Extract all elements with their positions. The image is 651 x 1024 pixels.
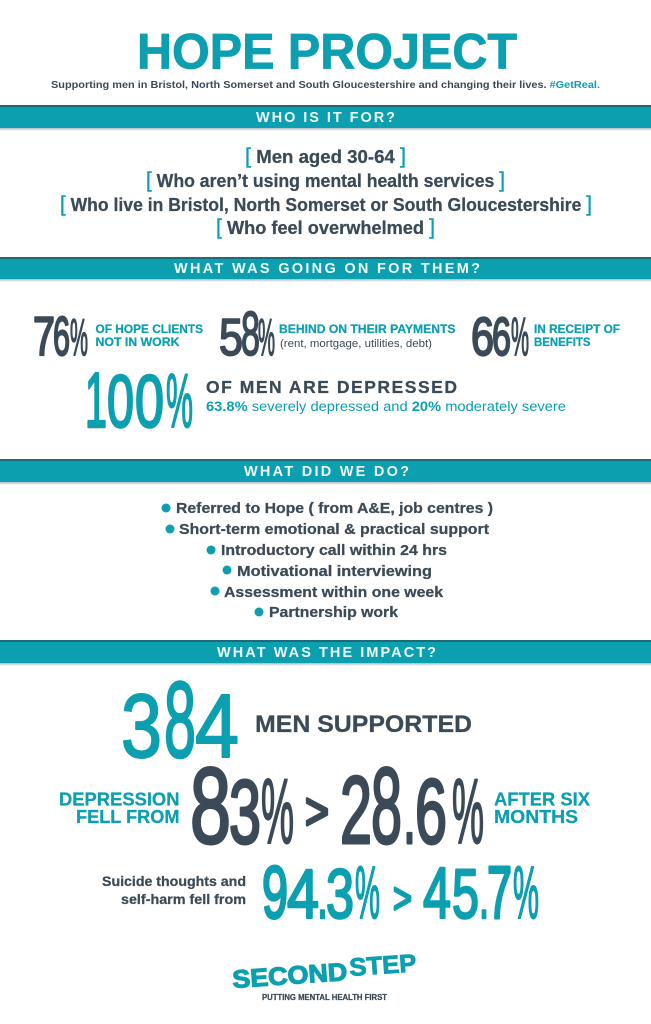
stat: 66% in receipt of benefits: IN RECEIPT OF — [534, 322, 620, 336]
stat: depression fell: % — [261, 761, 294, 863]
stat: depression fell: . — [403, 763, 416, 863]
section band: what was the impact — [0, 640, 651, 666]
stat: suicide thoughts fell: 3 — [326, 855, 354, 933]
text: % — [513, 851, 539, 934]
stat: 100% depressed: 0 — [135, 360, 164, 443]
stat: suicide thoughts fell: Suicide thoughts and — [102, 873, 246, 889]
stat: 66% in receipt of benefits: BENEFITS — [534, 335, 590, 349]
stat: 76% not in work: % — [70, 309, 88, 367]
stat: suicide thoughts fell: . — [479, 855, 489, 933]
stat: 76% not in work: OF HOPE CLIENTS — [96, 322, 203, 336]
audience: men aged 30-64: [ Men aged 30-64 ] — [245, 145, 406, 168]
stat: depression fell — [59, 745, 590, 866]
stat: 384 men supported: 8 — [164, 659, 196, 780]
stat: 100% depressed: OF MEN ARE DEPRESSED — [206, 377, 457, 397]
stat: 76% not in work: 7 — [33, 305, 55, 367]
stat: suicide thoughts fell: self-harm fell from — [121, 891, 246, 907]
list item: short-term support: Short-term emotional & practical support — [179, 521, 489, 538]
stat: 100% depressed: 0 — [107, 360, 134, 443]
list item: introductory call: Introductory call within 24 hrs — [221, 542, 447, 559]
stat: 384 men supported — [121, 659, 472, 780]
stat: 384 men supported: MEN SUPPORTED — [255, 711, 472, 738]
list item: partnership work: Partnership work — [269, 604, 399, 621]
stat: depression fell: 8 — [371, 745, 402, 866]
stat: 76% not in work — [33, 305, 203, 367]
section band: what was going on: WHAT WAS GOING ON FOR THEM? — [174, 261, 480, 277]
stat: 58% behind on payments: % — [258, 309, 275, 367]
panel: what did we do list — [162, 500, 493, 621]
list item: assessment: Assessment within one week — [224, 584, 444, 601]
stat: suicide thoughts fell — [102, 851, 539, 934]
section band: what was going on — [0, 257, 651, 282]
stat: depression fell: FELL FROM — [76, 807, 180, 827]
section band: who is it for: WHO IS IT FOR? — [256, 110, 395, 126]
stat: 66% in receipt of benefits — [471, 307, 620, 367]
stat: 66% in receipt of benefits: 6 — [492, 307, 511, 367]
stat: depression fell: MONTHS — [494, 807, 578, 827]
stat: 100% depressed: % — [166, 359, 193, 444]
stat: 58% behind on payments: BEHIND ON THEIR PAYMENTS — [279, 322, 456, 336]
audience: location: [ Who live in Bristol, North Somerset or South Gloucestershire ] — [60, 193, 592, 216]
stat: 100% depressed — [85, 356, 566, 444]
stat: depression fell: 8 — [190, 745, 231, 866]
stat: 100% depressed: 63.8% severely depressed and 20% moderately severe — [206, 398, 566, 414]
stat: 384 men supported: 3 — [121, 677, 162, 777]
logo: Second Step — [231, 949, 417, 1002]
logo: Second Step: SECOND — [231, 958, 348, 994]
section band: what did we do: WHAT DID WE DO? — [244, 464, 409, 480]
audience: not using services: [ Who aren’t using mental health services ] — [146, 169, 505, 192]
stat: depression fell: > — [305, 783, 329, 841]
stat: suicide thoughts fell: . — [317, 855, 328, 933]
stat: 58% behind on payments: (rent, mortgage, utilities, debt) — [280, 338, 432, 350]
stat: 384 men supported: 4 — [195, 677, 239, 777]
stat: depression fell: 3 — [229, 763, 261, 863]
stat: 58% behind on payments: 5 — [219, 309, 243, 367]
section band: who is it for — [0, 105, 651, 131]
stat: suicide thoughts fell: > — [393, 874, 412, 923]
logo: Second Step: STEP — [348, 949, 417, 982]
stat: depression fell: DEPRESSION — [59, 790, 180, 810]
stat: suicide thoughts fell: 5 — [452, 855, 479, 933]
list item: referred: Referred to Hope ( from A&E, job centres ) — [176, 500, 493, 517]
list item: motivational interviewing: Motivational interviewing — [237, 563, 432, 580]
panel: who is it for list — [60, 145, 592, 239]
stat: suicide thoughts fell: 7 — [487, 851, 512, 934]
section band: what did we do — [0, 459, 651, 485]
stat: suicide thoughts fell: 9 — [262, 851, 288, 934]
stat: suicide thoughts fell: 4 — [287, 855, 319, 933]
stat: depression fell: % — [452, 761, 484, 863]
stat: 76% not in work: 6 — [53, 305, 70, 367]
stat: 66% in receipt of benefits: % — [511, 307, 529, 367]
title: HOPE PROJECT — [137, 24, 517, 80]
stat: 58% behind on payments — [219, 300, 456, 369]
stat: 100% depressed: 1 — [85, 356, 107, 444]
stat: depression fell: AFTER SIX — [494, 790, 590, 810]
subtitle: Supporting men in Bristol, North Somerset and South Gloucestershire and changing their lives. #GetReal. — [51, 79, 600, 91]
stat: 76% not in work: NOT IN WORK — [96, 335, 180, 349]
stat: 58% behind on payments: 8 — [241, 300, 260, 369]
stat: suicide thoughts fell: % — [355, 851, 380, 934]
stat: suicide thoughts fell: 4 — [423, 854, 451, 934]
logo: Second Step: PUTTING MENTAL HEALTH FIRST — [262, 993, 387, 1002]
stat: depression fell: 6 — [415, 761, 447, 863]
stat: depression fell: 2 — [340, 757, 372, 864]
stat: 66% in receipt of benefits: 6 — [471, 307, 494, 367]
section band: what was the impact: WHAT WAS THE IMPACT? — [217, 645, 436, 661]
audience: overwhelmed: [ Who feel overwhelmed ] — [216, 216, 435, 239]
